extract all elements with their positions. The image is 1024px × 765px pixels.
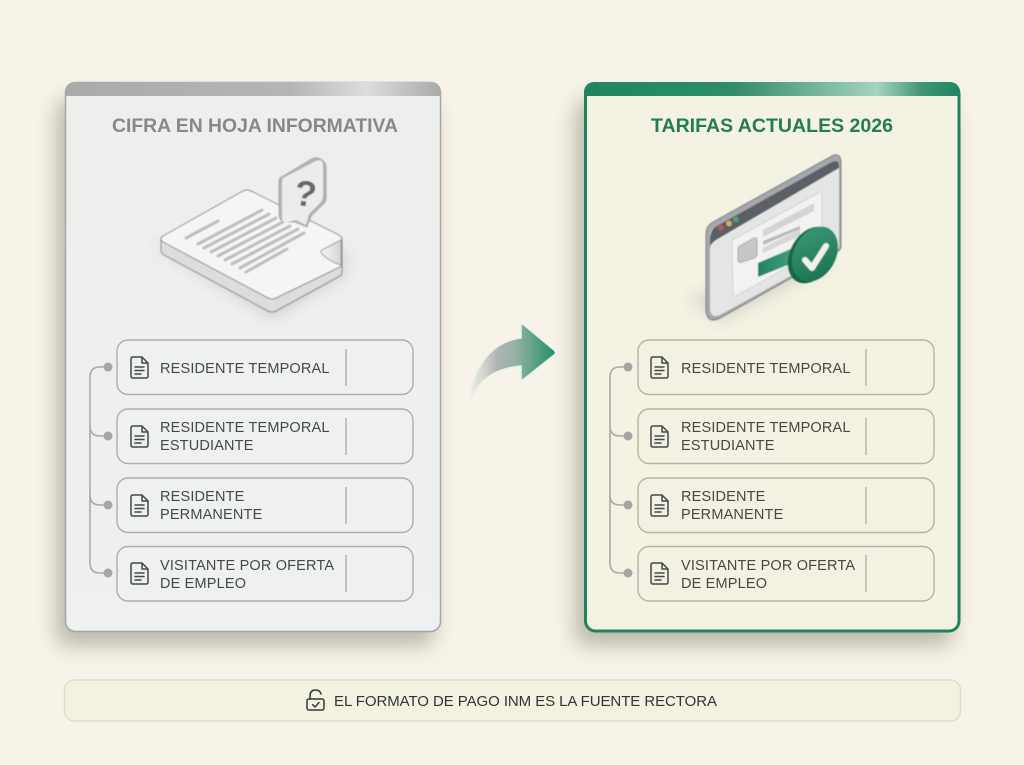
row: residente temporal: RESIDENTE TEMPORAL bbox=[160, 361, 330, 377]
check badge bbox=[778, 219, 844, 291]
panel shadow right bbox=[575, 100, 953, 646]
connector right bbox=[610, 367, 628, 573]
row: residente temporal estudiante bbox=[117, 409, 413, 464]
row: residente permanente: RESIDENTE bbox=[160, 489, 245, 505]
heading left: CIFRA EN HOJA INFORMATIVA bbox=[112, 115, 398, 137]
row: residente temporal estudiante: ESTUDIANTE bbox=[160, 438, 254, 454]
panel: cifra en hoja informativa bbox=[56, 82, 441, 646]
footer callout bbox=[64, 680, 960, 721]
row: residente temporal bbox=[638, 340, 934, 394]
row: visitante por oferta de empleo: VISITANTE POR OFERTA bbox=[681, 558, 855, 574]
row: residente permanente bbox=[638, 478, 934, 532]
icon: open lock with check bbox=[307, 690, 324, 710]
row: residente temporal estudiante bbox=[638, 409, 934, 464]
connector left bbox=[90, 367, 108, 573]
row: residente temporal bbox=[117, 340, 413, 394]
row: visitante por oferta de empleo: DE EMPLEO bbox=[681, 576, 767, 592]
row: residente permanente: PERMANENTE bbox=[681, 507, 784, 523]
row: visitante por oferta de empleo bbox=[117, 546, 413, 601]
connector bullets left bbox=[104, 362, 112, 578]
row: visitante por oferta de empleo: VISITANTE POR OFERTA bbox=[160, 558, 334, 574]
connector bullets right bbox=[624, 362, 632, 578]
row: residente temporal estudiante: ESTUDIANTE bbox=[681, 438, 775, 454]
document text lines bbox=[186, 210, 304, 272]
panel body right bbox=[586, 84, 959, 631]
arrow: from left to right panel bbox=[471, 324, 556, 398]
icon: document with question bubble: ? bbox=[292, 172, 319, 215]
row: residente temporal: RESIDENTE TEMPORAL bbox=[681, 361, 851, 377]
row: residente temporal estudiante: RESIDENTE TEMPORAL bbox=[160, 420, 330, 436]
icon: browser window with check badge bbox=[690, 155, 847, 322]
row: residente permanente: RESIDENTE bbox=[681, 489, 766, 505]
row: residente permanente bbox=[117, 478, 413, 532]
row: visitante por oferta de empleo: DE EMPLEO bbox=[160, 576, 246, 592]
row: visitante por oferta de empleo bbox=[638, 546, 934, 601]
panel top bar left bbox=[65, 82, 441, 96]
row: residente permanente: PERMANENTE bbox=[160, 507, 263, 523]
panel: tarifas actuales 2026 bbox=[575, 82, 960, 646]
panel shadow left bbox=[56, 100, 434, 646]
footer text: EL FORMATO DE PAGO INM ES LA FUENTE RECTORA bbox=[334, 693, 717, 710]
question bubble bbox=[279, 158, 326, 227]
heading right: TARIFAS ACTUALES 2026 bbox=[651, 115, 893, 137]
icon: document with question bubble bbox=[155, 158, 345, 318]
panel body left bbox=[66, 82, 440, 632]
row: residente temporal estudiante: RESIDENTE TEMPORAL bbox=[681, 420, 851, 436]
panel top bar right bbox=[584, 82, 960, 96]
